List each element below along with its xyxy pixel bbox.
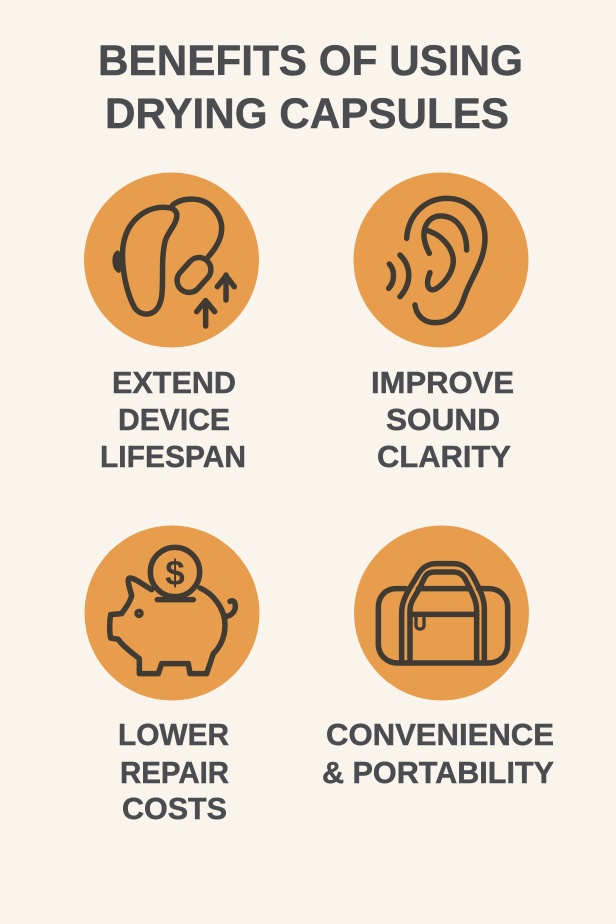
label: lower repair costs: REPAIR (120, 755, 229, 790)
title: DRYING CAPSULES (105, 90, 509, 138)
panel: lower repair costs (84, 526, 260, 826)
label: improve sound clarity (371, 365, 514, 474)
icon: travel bag (354, 526, 529, 700)
icon: ear with sound waves (354, 172, 528, 348)
title: BENEFITS OF USING (98, 37, 523, 85)
label: improve sound clarity: SOUND (386, 402, 500, 437)
icon: hearing aid with upward arrows (84, 172, 259, 348)
label: convenience and portability (322, 717, 554, 790)
label: improve sound clarity: IMPROVE (371, 365, 514, 400)
label: convenience and portability: CONVENIENCE (326, 717, 554, 752)
label: convenience and portability: & PORTABILITY (322, 755, 554, 790)
label: improve sound clarity: CLARITY (377, 439, 511, 474)
label: extend device lifespan: EXTEND (112, 365, 236, 400)
title (98, 37, 523, 138)
label: lower repair costs (118, 717, 229, 826)
panel: extend device lifespan (84, 172, 259, 474)
label: lower repair costs: LOWER (118, 717, 229, 752)
icon: piggy bank with dollar coin (84, 526, 260, 700)
panel: convenience and portability (322, 526, 554, 790)
label: extend device lifespan: DEVICE (118, 402, 230, 437)
panel: improve sound clarity (354, 172, 528, 474)
label: lower repair costs: COSTS (122, 791, 227, 826)
icon: piggy bank with dollar coin: $ (165, 554, 185, 593)
label: extend device lifespan: LIFESPAN (100, 439, 246, 474)
label: extend device lifespan (100, 365, 246, 474)
